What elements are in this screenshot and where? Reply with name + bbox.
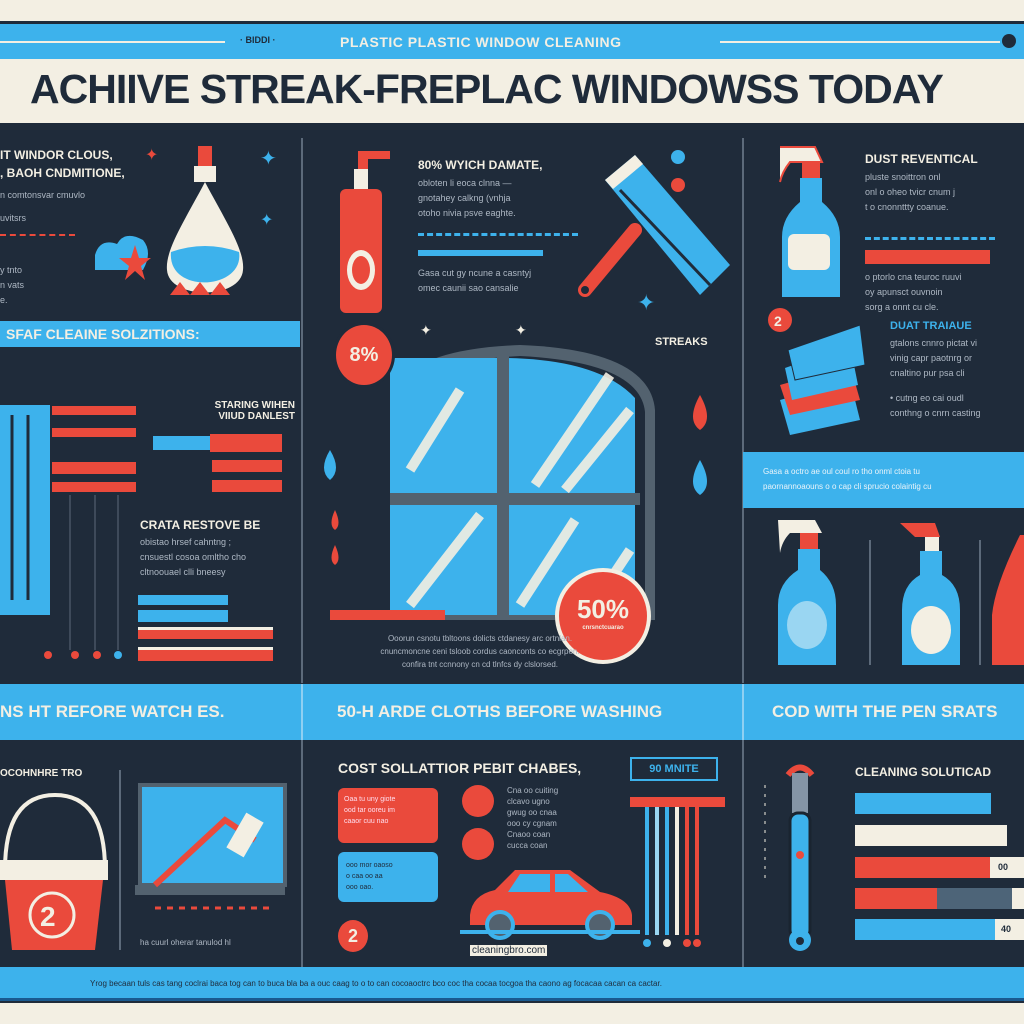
banner: right info band (743, 452, 1024, 508)
bar chart: cleaning solutions: CLEANING SOLUTICAD (855, 765, 991, 779)
bar chart: cleaning solutions: 00 (998, 862, 1008, 872)
illustration: window: STREAKS (655, 336, 708, 348)
text block: cost solution: COST SOLLATTIOR PEBIT CHABES, (338, 760, 581, 776)
text block: cost solution: 90 MNITE (649, 763, 699, 775)
footer blue strip: Yrog becaan tuls cas tang coclrai baca tog can to buca bla ba a ouc caag to o to can cocoaoctrc bco coc tha cocaa tocgoa tha caono ag focacaa cacan ca cactar. (90, 979, 662, 988)
footer blue strip (0, 967, 1024, 1001)
illustration: squeegee on glass: ha cuurl oherar tanulod hl (140, 938, 231, 947)
text block: dust reventical: t o cnonnttty coanue. (865, 202, 949, 212)
text block: crata restove: cnsuestl cosoa omltho cho (140, 552, 246, 562)
text block: dust reventical: oy apunsct ouvnoin (865, 287, 943, 297)
panel: left top text: IT WINDOR CLOUS, (0, 148, 113, 162)
badge: 8%: 8% (350, 344, 378, 366)
text block: window caption (380, 634, 580, 669)
icon: red bucket (0, 768, 108, 950)
text block: duat traiaue: vinig capr paotnrg or (890, 353, 972, 363)
top blue header bar: · BIDDI · (240, 35, 276, 45)
badge: 8% (333, 322, 395, 388)
panel: left top text: n comtonsvar cmuvlo (0, 190, 85, 200)
illustration: window: ✦ (515, 322, 527, 338)
drops (324, 450, 336, 480)
text block: window caption: cnuncmoncne ceni tsloob cordus caonconts co ecgrpen. (380, 647, 580, 656)
callout: blue box: o caa oo aa (346, 873, 383, 880)
illustration: squeegee on glass (119, 770, 287, 950)
text block: 80% wyicn damate: 80% WYICH DAMATE, (418, 158, 542, 172)
text block: duat traiaue: gtalons cnnro pictat vi (890, 338, 977, 348)
icon: squeegee (578, 150, 730, 315)
icons: red circles with text: cucca coan (507, 841, 547, 850)
icon: thermometer tool (764, 764, 814, 951)
text block: duat traiaue: conthng o cnrn casting (890, 408, 981, 418)
banner: middle blue band: 50-H ARDE CLOTHS BEFORE WASHING (337, 702, 662, 721)
illustration: blinds (0, 405, 136, 659)
icon: spray bottle drop: ✦ (145, 147, 158, 164)
top blue header bar: PLASTIC PLASTIC WINDOW CLEANING (340, 34, 622, 50)
callout: red box: caaor cuu nao (344, 818, 388, 825)
icon: red bucket: 2 (40, 901, 56, 932)
banner: middle blue band: NS HT REFORE WATCH ES. (0, 702, 224, 721)
callout: blue box: ooo mor oaoso (346, 862, 393, 869)
badge: 50%: cnrsnctcuarao (582, 625, 624, 631)
badge: 2: 2 (348, 926, 358, 946)
bar chart: cleaning solutions (855, 765, 1024, 940)
icons: red circles with text: gwug oo cnaa (507, 808, 557, 817)
text block: crata restove (140, 518, 260, 577)
top blue header bar (0, 21, 1024, 59)
panel: left top text: y tnto (0, 265, 22, 275)
illustration: stacked cloths (138, 595, 273, 661)
banner: middle blue band (0, 684, 1024, 740)
text block: dust reventical: o ptorlo cna teuroc ruuvi (865, 272, 962, 282)
text block: crata restove: cltnoouael clli bneesy (140, 567, 226, 577)
text block: 80% wyicn damate: gnotahey calkng (vnhja (418, 193, 511, 203)
text block: window caption: confira tnt ccnnony cn cd tlnfcs dy clslorsed. (402, 660, 558, 669)
icons: red circles with text: ooo cy cgnam (507, 819, 557, 828)
text block: duat traiaue: • cutng eo cai oudl (890, 393, 964, 403)
badge: 2 (338, 920, 368, 952)
badge: 50% (555, 568, 651, 664)
icon: spray bottle drop: ✦ (260, 212, 273, 229)
icons: red circles with text: Cna oo cuiting (507, 786, 558, 795)
illustration: window (324, 322, 708, 620)
bar chart: cleaning solutions: 40 (1001, 924, 1011, 934)
text block: dust reventical (865, 152, 995, 312)
icon: red soap bottle (340, 151, 390, 313)
banner: right info band: paornannoaouns o o cap cli sprucio colaintig cu (763, 482, 932, 491)
callout: red box: Oaa tu uny giote (344, 796, 395, 803)
text block: staring when: VIIUD DANLEST (218, 411, 295, 422)
icons: spray bottles row (778, 520, 1024, 665)
banner: safe cleaning solutions: SFAF CLEAINE SOLZITIONS: (6, 326, 200, 342)
icons: red circles with text (462, 785, 558, 860)
banner: middle blue band: COD WITH THE PEN SRATS (772, 702, 997, 721)
badge: 50%: 50% (577, 594, 629, 624)
text block: 80% wyicn damate (418, 158, 578, 293)
text block: 80% wyicn damate: omec caunii sao cansalie (418, 283, 519, 293)
icon: stacked cloths: 2 (774, 313, 782, 329)
icon: blue spray bottle top right (779, 146, 840, 297)
icons: red circles with text: clcavo ugno (507, 797, 550, 806)
icon: red bucket: OCOHNHRE TRO (0, 768, 82, 779)
text: sorg a onnt cu cle. (865, 302, 939, 312)
text block: cost solution (338, 757, 718, 781)
icon: stacked cloths (768, 308, 864, 435)
banner: safe cleaning solutions (0, 321, 300, 347)
callout: blue box (338, 852, 438, 902)
illustration: window: ✦ (420, 322, 432, 338)
text block: window caption: Ooorun csnotu tbltoons dolicts ctdanesy arc ortnlan. (388, 634, 572, 643)
illustration: rod and strands (630, 797, 725, 947)
panel: left top text: uvitsrs (0, 213, 26, 223)
text block: dust reventical: DUST REVENTICAL (865, 152, 978, 166)
text block: 80% wyicn damate: otoho nivia psve eaghte. (418, 208, 516, 218)
text block: duat traiaue: cnaltino pur psa cli (890, 368, 965, 378)
panel: left top text: , BAOH CNDMITIONE, (0, 166, 125, 180)
text block: 80% wyicn damate: obloten li eoca clnna — (418, 178, 512, 188)
panel: left top text (0, 148, 125, 305)
title: ACHIIVE STREAK-FREPLAC WINDOWSS TODAY (30, 66, 943, 112)
text block: duat traiaue: DUAT TRAIAUE (890, 320, 972, 332)
text: e. (0, 295, 8, 305)
callout: blue box: ooo oao. (346, 884, 373, 891)
text block: dust reventical: pluste snoittron onl (865, 172, 941, 182)
text: watermark: cleaningbro.com (472, 945, 545, 956)
callout: red box (338, 788, 438, 843)
icon: spray bottle drop (95, 146, 277, 295)
text block: crata restove: CRATA RESTOVE BE (140, 518, 260, 532)
illustration: red car (460, 870, 640, 940)
icon: spray bottle drop: ✦ (260, 148, 277, 170)
text block: staring when (153, 400, 295, 492)
text block: crata restove: obistao hrsef cahntng ; (140, 537, 231, 547)
text block: staring when: STARING WIHEN (215, 400, 295, 411)
icons: red circles with text: Cnaoo coan (507, 830, 550, 839)
icon: squeegee: ✦ (637, 290, 655, 315)
banner: right info band: Gasa a octro ae oul coul ro tho onml ctoia tu (763, 467, 920, 476)
callout: red box: ood tar ooreu im (344, 807, 395, 814)
text block: dust reventical: onl o oheo tvicr cnum j (865, 187, 955, 197)
panel: left top text: n vats (0, 280, 24, 290)
text block: duat traiaue (890, 320, 981, 418)
text block: 80% wyicn damate: Gasa cut gy ncune a casntyj (418, 268, 531, 278)
